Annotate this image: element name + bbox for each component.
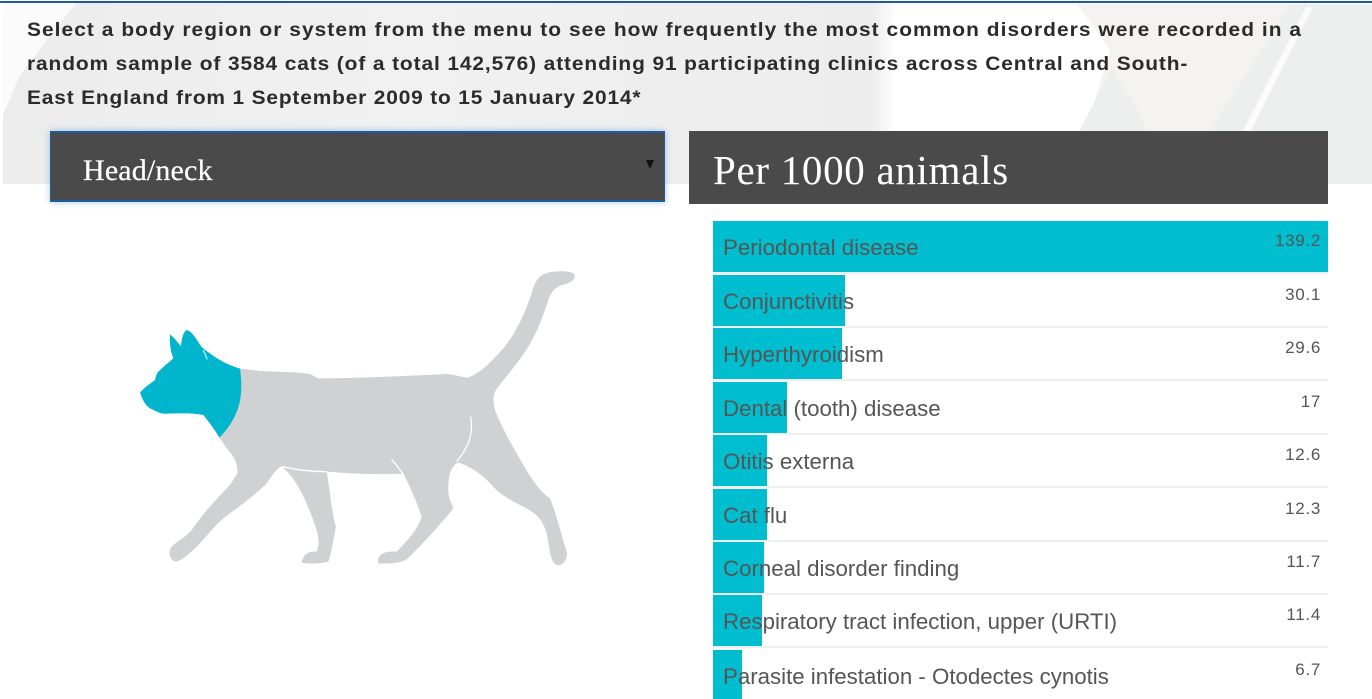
row: otitis externa: [713, 435, 1328, 488]
dropdown arrow: [646, 160, 654, 169]
row: hyperthyroidism: [713, 328, 1328, 381]
cat illustration: [140, 271, 575, 566]
body contour lines: [203, 350, 472, 474]
panel heading: per 1000 animals: [689, 131, 1328, 204]
top blue rule: [0, 1, 1372, 3]
row: otitis externa: 12.6: [1285, 444, 1321, 464]
row: corneal disorder finding: 11.7: [1286, 552, 1321, 570]
intro text: East England from 1 September 2009 to 15 January 2014*: [27, 88, 641, 109]
row: periodontal disease: 139.2: [1275, 230, 1321, 250]
region selector dropdown: [50, 131, 665, 202]
row: dental disease: Dental (tooth) disease: [723, 396, 941, 421]
row: cat flu: [713, 489, 1328, 542]
row: periodontal disease: [713, 221, 1328, 274]
row: dental disease: 17: [1301, 392, 1321, 410]
row: hyperthyroidism: 29.6: [1285, 338, 1321, 356]
row: upper respiratory tract infection: Respiratory tract infection, upper (URTI): [723, 609, 1117, 634]
row: cat flu: Cat flu: [723, 503, 787, 528]
cat body: [169, 271, 575, 565]
header background: [3, 3, 1372, 184]
row: periodontal disease: Periodontal disease: [723, 235, 918, 260]
row: corneal disorder finding: [713, 542, 1328, 595]
row: hyperthyroidism: Hyperthyroidism: [723, 342, 884, 367]
row: parasite infestation: Parasite infestation - Otodectes cynotis: [723, 664, 1109, 689]
panel heading: per 1000 animals: Per 1000 animals: [713, 147, 1009, 193]
row: otitis externa: Otitis externa: [723, 449, 854, 474]
row: dental disease: [713, 382, 1328, 435]
row: conjunctivitis: Conjunctivitis: [723, 289, 854, 314]
row: conjunctivitis: 30.1: [1285, 284, 1321, 304]
highlighted head and neck: [140, 330, 241, 438]
row: upper respiratory tract infection: 11.4: [1286, 604, 1321, 624]
intro text: [27, 20, 1302, 109]
row: conjunctivitis: [713, 275, 1328, 328]
bar chart: disorders per 1000 animals: [713, 221, 1328, 699]
row: parasite infestation: 6.7: [1295, 660, 1321, 678]
row: corneal disorder finding: Corneal disorder finding: [723, 556, 959, 581]
row: cat flu: 12.3: [1285, 498, 1321, 518]
row: upper respiratory tract infection: [713, 595, 1328, 648]
dropdown label: Head/neck: [83, 154, 213, 187]
intro text: Select a body region or system from the menu to see how frequently the most common disorders were recorded in a: [27, 20, 1302, 41]
intro text: random sample of 3584 cats (of a total 142,576) attending 91 participating clinics across Central and South-: [27, 54, 1188, 75]
row: parasite infestation: [713, 650, 1328, 699]
